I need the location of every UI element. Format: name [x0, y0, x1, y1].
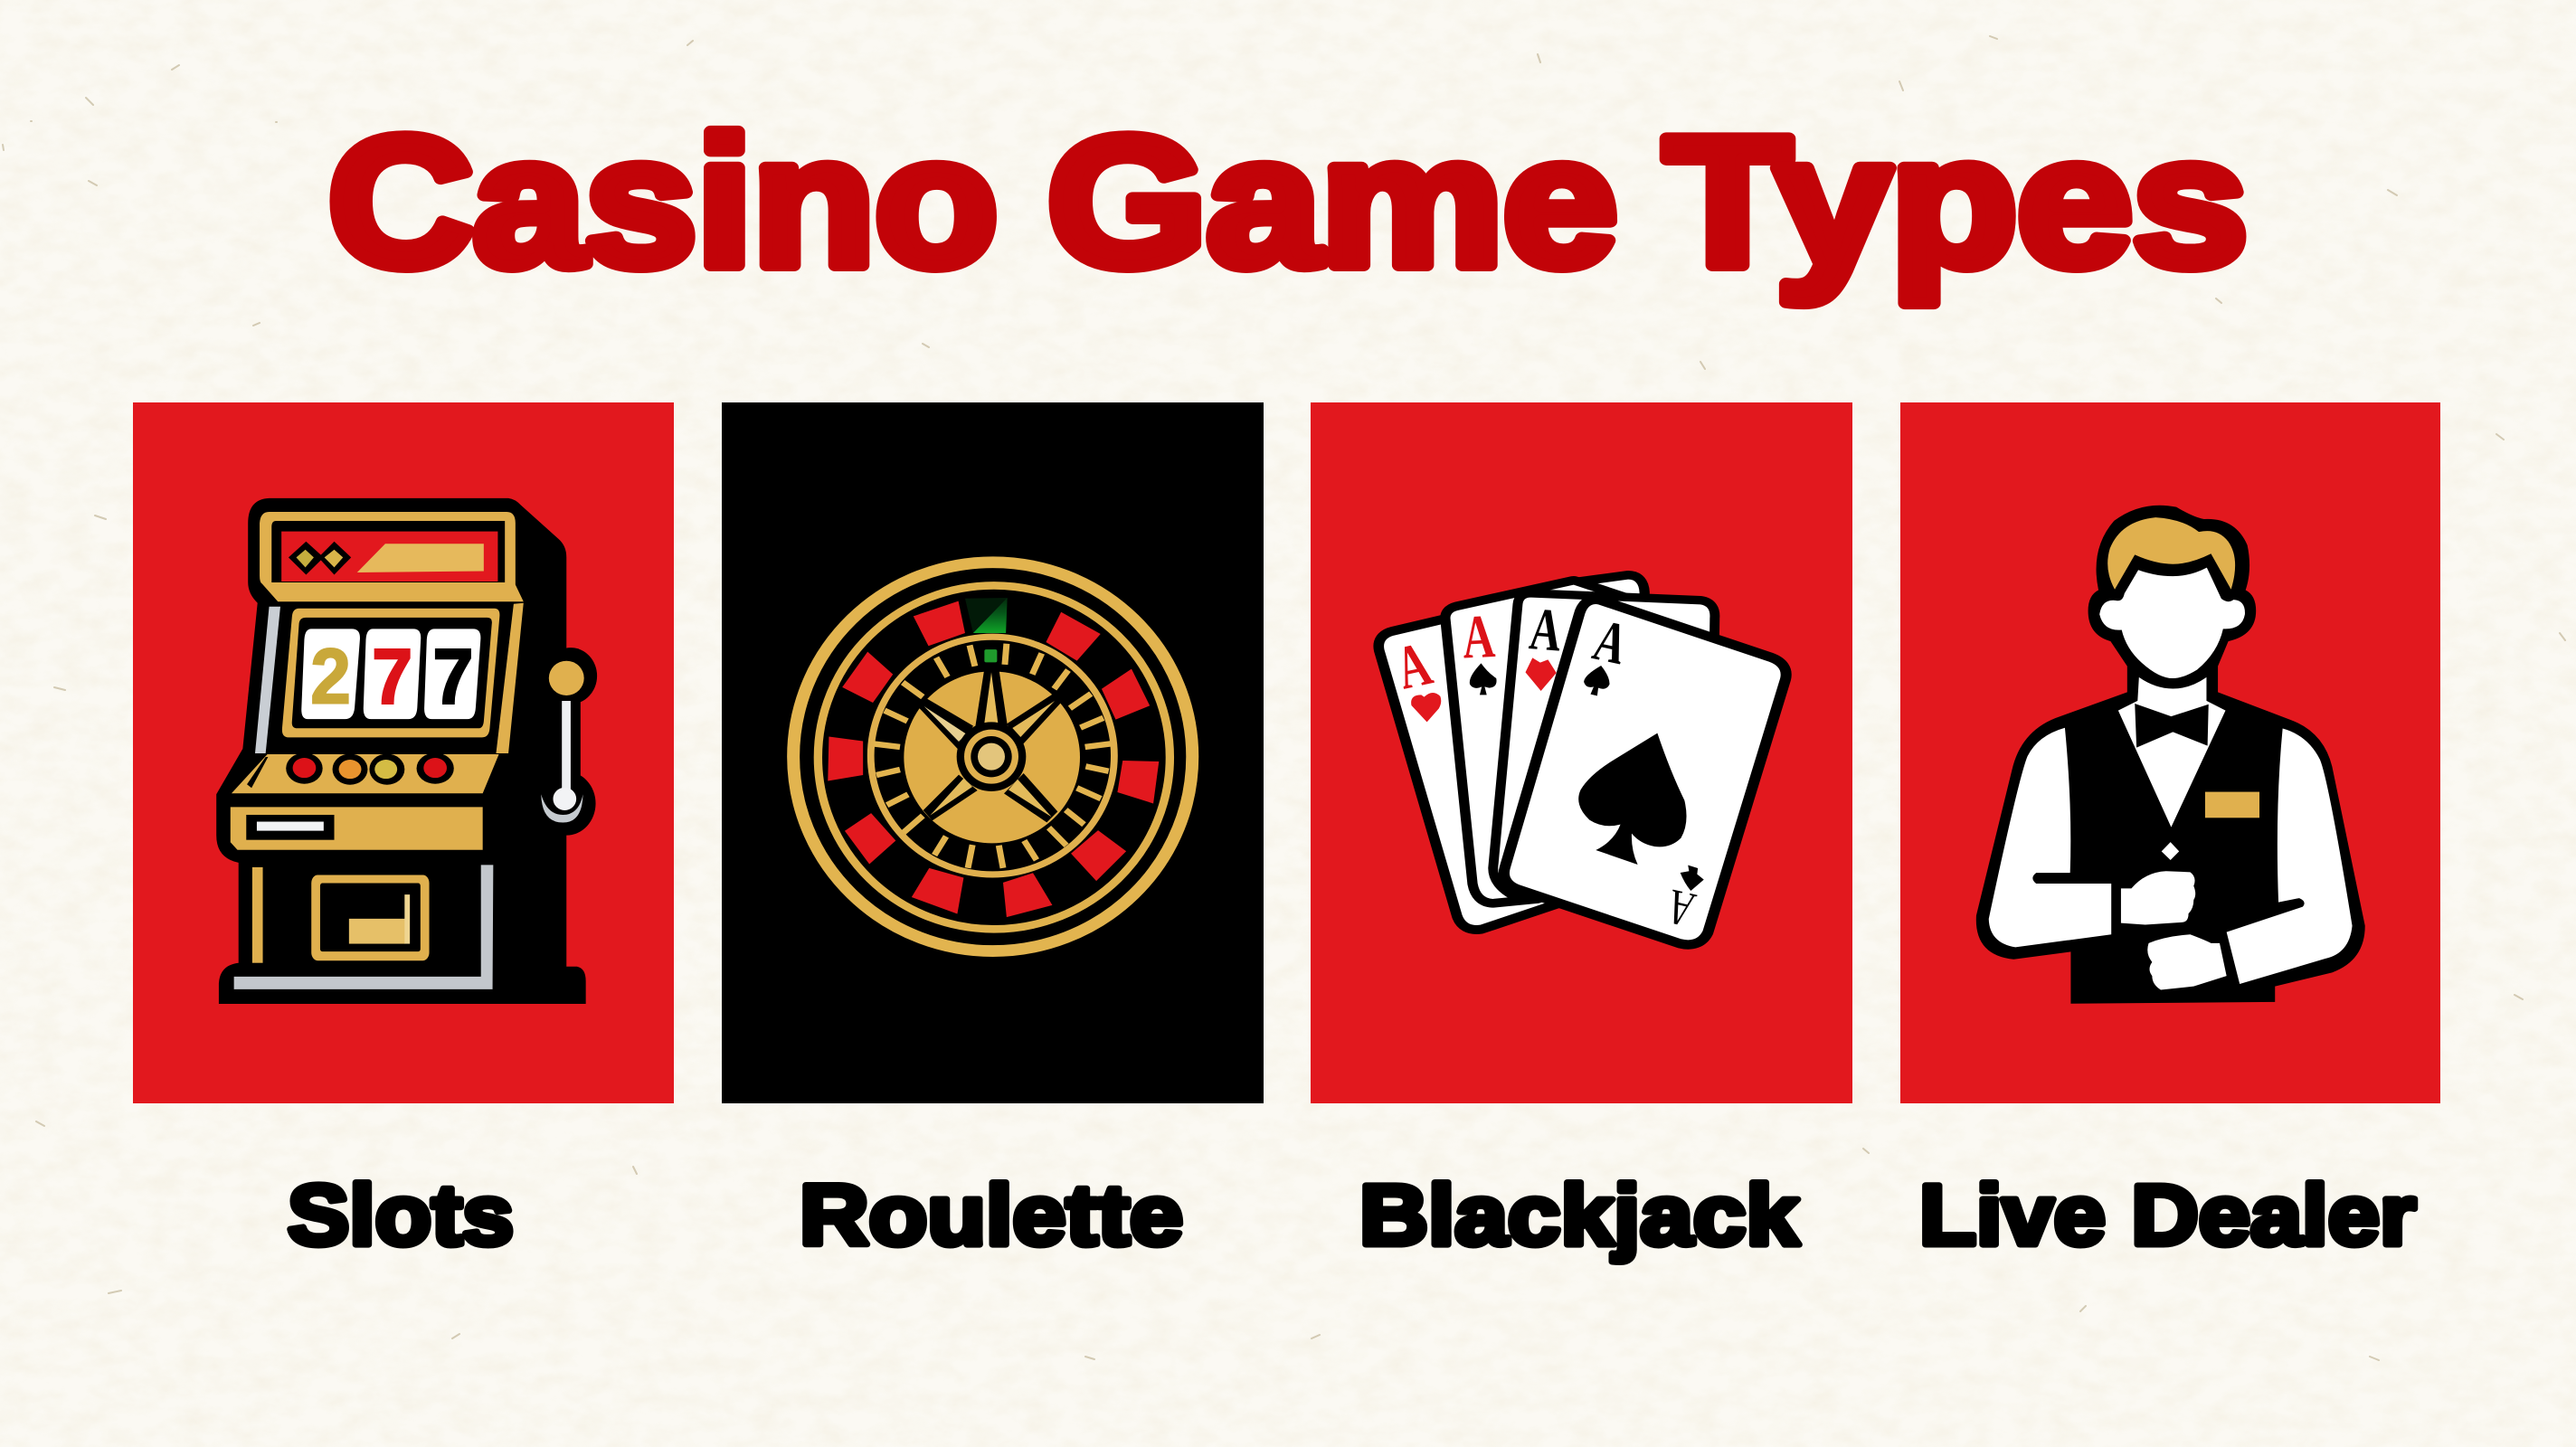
- icon: slot machine: [216, 498, 597, 1004]
- card: ace of spades front: [1510, 604, 1781, 940]
- panel: slots: [133, 402, 674, 1103]
- upper hand: [2121, 871, 2195, 925]
- icon: fanned cards: [1384, 580, 1781, 940]
- title: [328, 99, 2248, 305]
- panel: blackjack: [1311, 402, 1852, 1103]
- topper: [260, 512, 524, 601]
- icon: roulette wheel: [793, 563, 1192, 951]
- reels: 7: [433, 632, 473, 720]
- card: ace of diamonds: A: [1527, 595, 1565, 664]
- card: ace of spades front: A: [1660, 878, 1701, 937]
- reels: [282, 609, 499, 737]
- card: ace of spades red letter: A: [1460, 601, 1497, 671]
- red pockets: [828, 601, 1159, 917]
- label: roulette: Roulette: [800, 1168, 1183, 1263]
- title: Game: [1047, 99, 1617, 305]
- title: Types: [1664, 99, 2248, 305]
- card: ace of spades red letter: [1451, 585, 1628, 899]
- card: ace of hearts: [1384, 595, 1649, 925]
- panel: live dealer: [1900, 402, 2440, 1103]
- lower hand: [2147, 934, 2227, 989]
- title: Casino: [328, 99, 998, 305]
- label: blackjack: Blackjack: [1359, 1168, 1799, 1263]
- lever: [537, 648, 597, 836]
- hub: [957, 722, 1026, 791]
- label: live dealer: Live Dealer: [1919, 1168, 2416, 1263]
- reels: 2: [310, 632, 351, 720]
- icon: dealer figure: [1976, 506, 2365, 1004]
- cabinet base: [234, 865, 493, 989]
- hair: [2107, 517, 2235, 590]
- frets: [874, 644, 1111, 868]
- panel: roulette: [722, 402, 1264, 1103]
- coin slot bar: [231, 807, 483, 850]
- control deck and buttons: [232, 752, 499, 793]
- face: [2099, 568, 2245, 678]
- card: ace of hearts: A: [1388, 629, 1439, 702]
- card: ace of spades front: A: [1586, 608, 1634, 677]
- right arm: [2227, 729, 2353, 984]
- label: slots: Slots: [288, 1168, 514, 1263]
- vest button: [2162, 842, 2179, 860]
- spokes: [919, 668, 1061, 822]
- reels: 7: [372, 632, 412, 720]
- name badge: [2205, 792, 2259, 818]
- shirt and bow tie: [2118, 677, 2226, 828]
- rear card: [1558, 580, 1640, 633]
- left arm: [1989, 728, 2111, 947]
- card: ace of diamonds: [1498, 595, 1709, 894]
